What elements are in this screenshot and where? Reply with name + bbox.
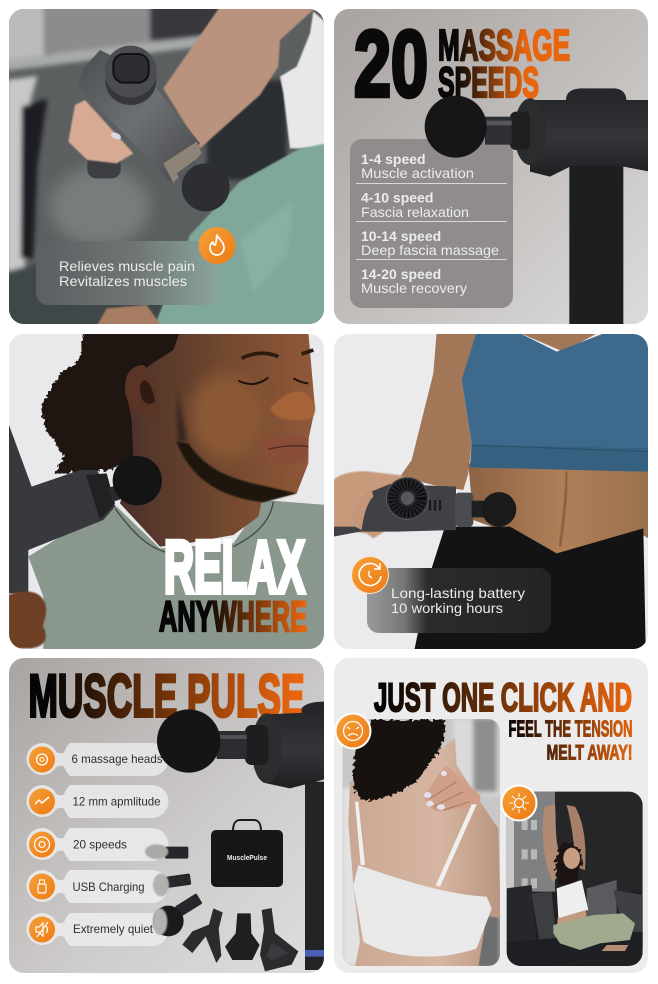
panel: 20 massage speeds — [334, 9, 650, 327]
speed row 2: 4-10 speed — [361, 190, 433, 206]
icon: sad face badge — [334, 712, 372, 750]
panel: muscle pulse features — [9, 658, 328, 973]
title: muscle pulse: MUSCLE PULSE — [28, 662, 304, 730]
feature: usb charging: USB Charging — [72, 880, 144, 894]
photo: woman torso with massage gun — [330, 330, 658, 663]
title: 20 massage speeds: SPEEDS — [438, 59, 539, 107]
massage head attachments — [145, 844, 298, 971]
glass caption panel — [367, 568, 551, 633]
icon: sun badge — [500, 784, 538, 822]
photo: woman with neck pain — [342, 718, 501, 968]
photo: arm holding massage gun — [9, 9, 324, 324]
title: 20 massage speeds: MASSAGE — [438, 21, 570, 70]
icon: clock badge — [351, 556, 389, 594]
massage gun — [157, 702, 328, 970]
title: 20 massage speeds: 20 — [354, 11, 428, 116]
feature: 12 mm amplitude: 12 mm apmlitude — [72, 794, 161, 808]
panel: relax anywhere — [9, 334, 324, 649]
icon: massage gun with vent disk — [333, 477, 516, 537]
panel: just one click — [334, 658, 648, 973]
panel: relieves muscle pain — [9, 9, 324, 324]
speed row 1: 1-4 speed — [361, 151, 426, 167]
panel background — [9, 658, 324, 973]
carrying case — [211, 820, 283, 887]
speed row 4: Muscle recovery — [361, 280, 467, 296]
icon: metal massage gun — [68, 46, 230, 211]
speed row 1: Muscle activation — [361, 165, 474, 181]
feature: 20 speeds: 20 speeds — [73, 838, 127, 852]
subheading: feel the tension melt away — [508, 716, 632, 764]
feature: 12 mm amplitude — [26, 785, 169, 818]
icon: black massage gun — [9, 425, 162, 593]
feature: 20 speeds — [26, 828, 169, 861]
hand on gun — [8, 591, 46, 648]
caption text: Revitalizes muscles — [59, 273, 187, 289]
panel background — [334, 658, 648, 973]
feature: usb charging — [26, 870, 169, 903]
massage gun — [425, 88, 650, 327]
panel background — [334, 9, 648, 324]
glass caption panel — [36, 241, 220, 305]
feature: extremely quiet: Extremely quiet — [73, 922, 154, 936]
speed row 2: Fascia relaxation — [361, 204, 469, 220]
speeds table — [350, 139, 513, 308]
photo: woman stretching on sofa — [507, 792, 643, 966]
speed row 4: 14-20 speed — [361, 266, 441, 282]
heading: anywhere: ANYWHERE — [159, 594, 307, 641]
feature: 6 massage heads — [26, 743, 169, 776]
caption text: 10 working hours — [391, 600, 503, 616]
speed row 3: Deep fascia massage — [361, 242, 499, 258]
caption text: Long-lasting battery — [391, 585, 525, 601]
heading: relax: RELAX — [164, 526, 305, 608]
carrying case: MusclePulse — [227, 853, 267, 862]
feature: 6 massage heads: 6 massage heads — [72, 752, 162, 766]
speed row 3: 10-14 speed — [361, 228, 441, 244]
title: 20 massage speeds — [354, 28, 570, 100]
icon: flame badge — [198, 227, 236, 264]
feature: extremely quiet — [26, 913, 169, 946]
photo: man with massage gun at neck — [9, 334, 324, 649]
panel: long-lasting battery — [330, 330, 658, 663]
caption text: Relieves muscle pain — [59, 258, 195, 274]
